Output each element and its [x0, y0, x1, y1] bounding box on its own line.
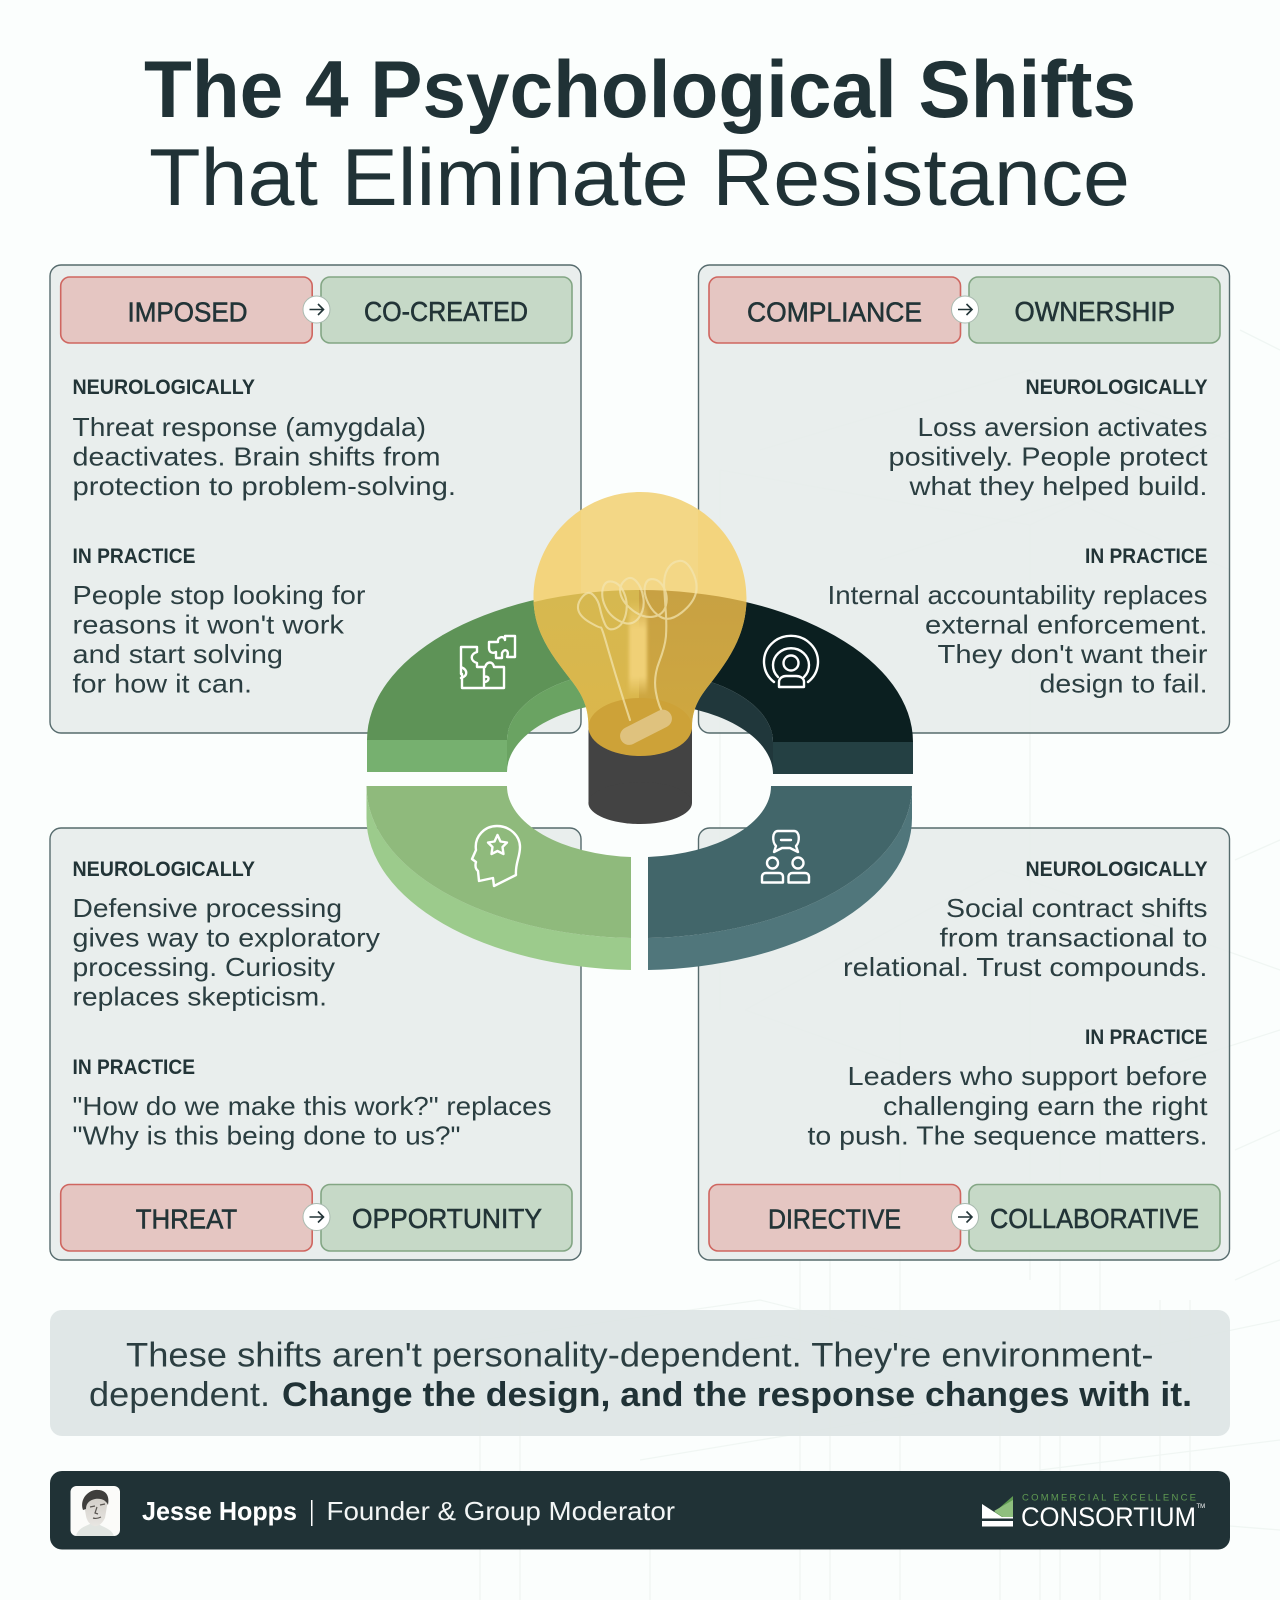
- text: neurologically: Loss aversion activates: [918, 412, 1208, 442]
- panel: imposed to co-created: [50, 265, 581, 733]
- text: neurologically: protection to problem-solving.: [72, 471, 456, 501]
- text: in practice: "Why is this being done to us?": [72, 1120, 460, 1150]
- segment: top right dark: [648, 590, 913, 774]
- text: in practice: design to fail.: [1040, 668, 1208, 698]
- icon: target: [764, 636, 818, 687]
- text: in practice: reasons it won't work: [72, 610, 345, 640]
- text: in practice: "How do we make this work?" replaces: [72, 1091, 552, 1121]
- logo: [982, 1492, 1205, 1532]
- filament plate: [617, 707, 675, 748]
- tag: directive: [709, 1184, 960, 1251]
- segment: bottom left light green: [366, 786, 631, 970]
- portrait: [70, 1486, 120, 1536]
- text: neurologically: NEUROLOGICALLY: [72, 376, 255, 399]
- text: in practice: They don't want their: [938, 639, 1208, 669]
- text: neurologically: what they helped build.: [908, 471, 1208, 501]
- bulb base: [588, 727, 692, 824]
- text: in practice: external enforcement.: [925, 610, 1208, 640]
- icon: puzzle: [461, 636, 515, 688]
- arrow: [952, 1204, 978, 1230]
- tag: co-created: CO-CREATED: [364, 296, 528, 327]
- logo: CONSORTIUM: [1021, 1502, 1196, 1532]
- tag: collaborative: [969, 1184, 1220, 1251]
- text: in practice: challenging earn the right: [883, 1091, 1208, 1121]
- text: neurologically: NEUROLOGICALLY: [72, 858, 255, 881]
- text: neurologically: [72, 858, 380, 1012]
- tag: collaborative: COLLABORATIVE: [990, 1203, 1199, 1234]
- callout: Change the design, and the response changes with it.: [282, 1376, 1192, 1414]
- tag: compliance: COMPLIANCE: [747, 296, 922, 328]
- text: neurologically: replaces skepticism.: [72, 982, 327, 1012]
- text: in practice: People stop looking for: [72, 580, 366, 610]
- text: in practice: IN PRACTICE: [1085, 545, 1208, 568]
- tag: threat: THREAT: [136, 1204, 237, 1234]
- text: neurologically: Defensive processing: [72, 893, 342, 923]
- icon: light bulb: [534, 492, 746, 824]
- text: in practice: to push. The sequence matters.: [808, 1120, 1208, 1150]
- tag: imposed: [61, 277, 312, 343]
- logo: TM: [1196, 1504, 1205, 1510]
- callout: [50, 1310, 1230, 1436]
- arrow: [303, 296, 330, 323]
- text: in practice: and start solving: [72, 639, 283, 669]
- separator: [311, 1500, 312, 1526]
- text: in practice: [72, 545, 366, 698]
- text: neurologically: relational. Trust compounds.: [843, 952, 1208, 982]
- text: neurologically: [843, 858, 1208, 982]
- arrow: [303, 1204, 330, 1230]
- text: neurologically: processing. Curiosity: [72, 952, 335, 982]
- text: neurologically: positively. People protect: [888, 442, 1208, 472]
- text: neurologically: from transactional to: [940, 922, 1208, 952]
- text: neurologically: Threat response (amygdala): [72, 412, 426, 442]
- bulb collar: [588, 698, 692, 756]
- tag: imposed: IMPOSED: [128, 296, 248, 328]
- title: The 4 Psychological Shifts: [144, 45, 1136, 135]
- tag: ownership: [969, 277, 1220, 343]
- text: in practice: IN PRACTICE: [1085, 1026, 1208, 1049]
- text: neurologically: deactivates. Brain shifts from: [72, 442, 440, 472]
- text: neurologically: [72, 376, 456, 501]
- text: in practice: IN PRACTICE: [72, 1056, 195, 1079]
- tag: ownership: OWNERSHIP: [1014, 296, 1175, 327]
- text: in practice: [72, 1056, 552, 1150]
- logo: COMMERCIAL EXCELLENCE: [1022, 1492, 1196, 1504]
- title: [144, 45, 1136, 223]
- tag: opportunity: [321, 1184, 572, 1251]
- arrow: [952, 296, 978, 323]
- tag: opportunity: OPPORTUNITY: [352, 1203, 542, 1234]
- text: neurologically: gives way to exploratory: [72, 922, 380, 952]
- panel: threat to opportunity: [50, 828, 581, 1260]
- text: in practice: for how it can.: [72, 668, 252, 698]
- tag: directive: DIRECTIVE: [768, 1204, 901, 1234]
- filament: [578, 561, 697, 720]
- text: neurologically: NEUROLOGICALLY: [1026, 376, 1208, 399]
- tag: compliance: [709, 277, 960, 343]
- text: in practice: Internal accountability replaces: [828, 580, 1208, 610]
- text: neurologically: Social contract shifts: [946, 893, 1208, 923]
- segment: top left green: [367, 588, 631, 772]
- icon: head with star: [472, 826, 520, 886]
- text: in practice: Leaders who support before: [848, 1061, 1208, 1091]
- text: in practice: [808, 1026, 1208, 1150]
- text: neurologically: [888, 376, 1208, 501]
- panel: compliance to ownership: [698, 265, 1230, 733]
- footer bar: [50, 1471, 1230, 1550]
- title: That Eliminate Resistance: [149, 133, 1130, 223]
- chart: 3D donut: [366, 588, 913, 970]
- tag: co-created: [321, 277, 572, 343]
- text: in practice: [828, 545, 1208, 698]
- segment: bottom right teal: [648, 786, 912, 970]
- icon: people: [762, 831, 809, 882]
- tag: threat: [61, 1184, 312, 1251]
- text: in practice: IN PRACTICE: [72, 545, 196, 568]
- presenter role: Founder & Group Moderator: [326, 1496, 675, 1526]
- presenter name: Jesse Hopps: [142, 1496, 297, 1526]
- panel: directive to collaborative: [698, 828, 1230, 1260]
- bulb glass: [534, 492, 746, 730]
- callout: dependent.: [89, 1376, 270, 1414]
- callout: These shifts aren't personality-dependent. They're environment-: [126, 1336, 1154, 1374]
- text: neurologically: NEUROLOGICALLY: [1026, 858, 1208, 881]
